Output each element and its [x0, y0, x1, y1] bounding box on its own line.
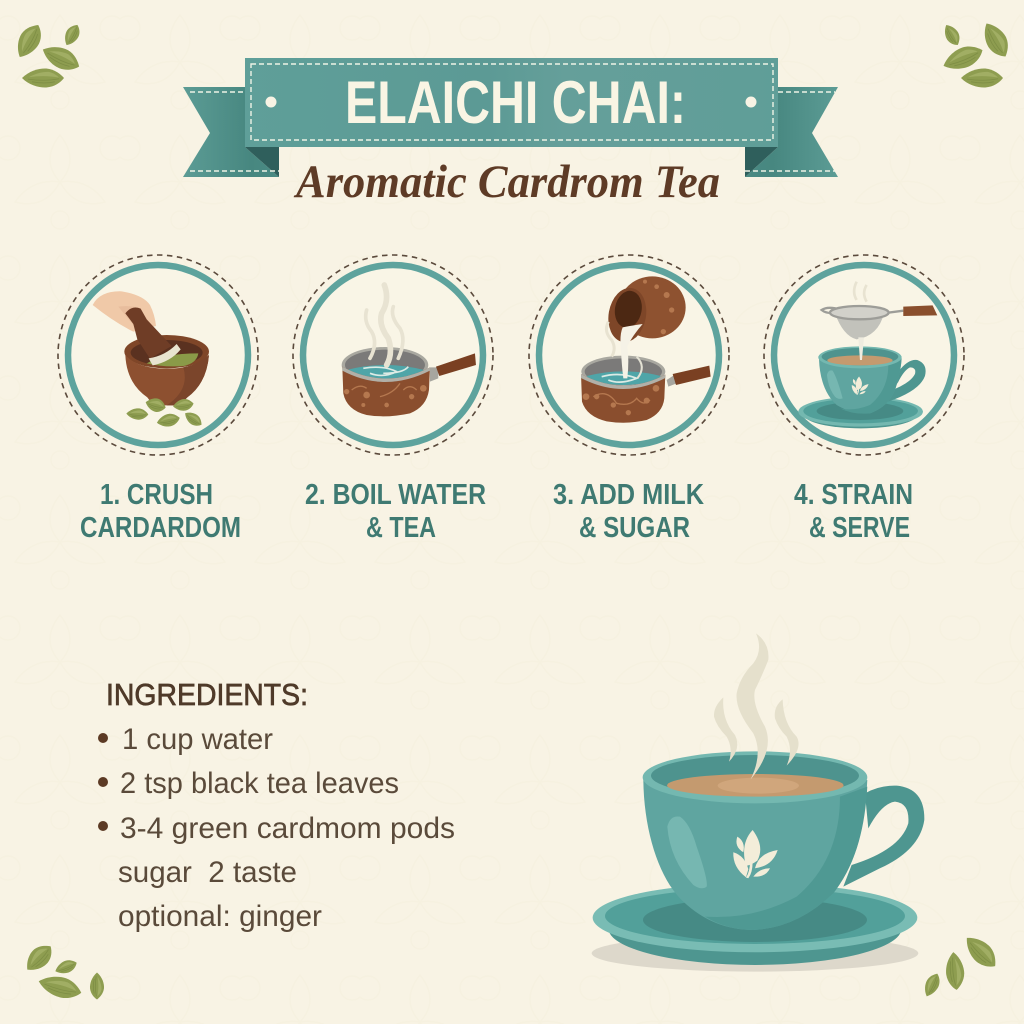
ingredients list: 3-4 green cardmom pods: [120, 812, 455, 845]
ingredients list: sugar 2 taste: [118, 856, 297, 889]
label: step 2: 2. BOIL WATER: [305, 479, 486, 511]
label: step 2: [305, 479, 486, 544]
heading: script subtitle: Aromatic Cardrom Tea: [293, 156, 720, 208]
ingredients list: 2 tsp black tea leaves: [120, 767, 399, 800]
label: step 4: 4. STRAIN: [794, 479, 913, 511]
icon: mortar and pestle with hand: [93, 291, 209, 429]
label: step 2: & TEA: [366, 512, 436, 544]
saucer: [593, 883, 917, 965]
cup body: [643, 780, 867, 930]
icon: cardamom pods top left: [11, 20, 83, 88]
title banner: [183, 58, 838, 177]
ingredients list: optional: ginger: [118, 900, 322, 933]
icon: cardamom pods bottom right: [921, 931, 1002, 999]
cup rim and tea: [643, 751, 867, 803]
panel: step 4 strain and serve: [764, 255, 964, 455]
label: step 1: [80, 479, 241, 544]
ingredients list: 1 cup water: [122, 723, 273, 756]
label: step 1: 1. CRUSH: [100, 479, 213, 511]
icon: saucepan with steam: [342, 285, 476, 416]
label: step 4: [794, 479, 913, 544]
panel: step 2 boil: [293, 255, 493, 455]
illustration: large teacup with steam: [592, 633, 924, 972]
icon: cardamom pods top right: [940, 19, 1014, 88]
label: step 4: & SERVE: [809, 512, 910, 544]
cup handle: [843, 786, 924, 887]
label: step 3: & SUGAR: [579, 512, 690, 544]
ingredients list: [98, 723, 455, 933]
panel: step 3 add milk: [529, 255, 729, 455]
heading: ingredients: INGREDIENTS:: [106, 677, 308, 712]
icon: jug pouring milk into saucepan: [581, 276, 711, 423]
saucer shadow: [592, 935, 918, 972]
icon: strainer above teacup: [798, 282, 937, 428]
steam: [714, 633, 799, 779]
label: step 3: 3. ADD MILK: [553, 479, 704, 511]
icon: cardamom pods bottom left: [21, 940, 104, 1002]
label: step 3: [553, 479, 704, 544]
icon: leaf emblem: [733, 830, 778, 878]
heading: main title: ELAICHI CHAI:: [345, 69, 686, 136]
panel: step 1 crush: [58, 255, 258, 455]
label: step 1: CARDARDOM: [80, 512, 241, 544]
